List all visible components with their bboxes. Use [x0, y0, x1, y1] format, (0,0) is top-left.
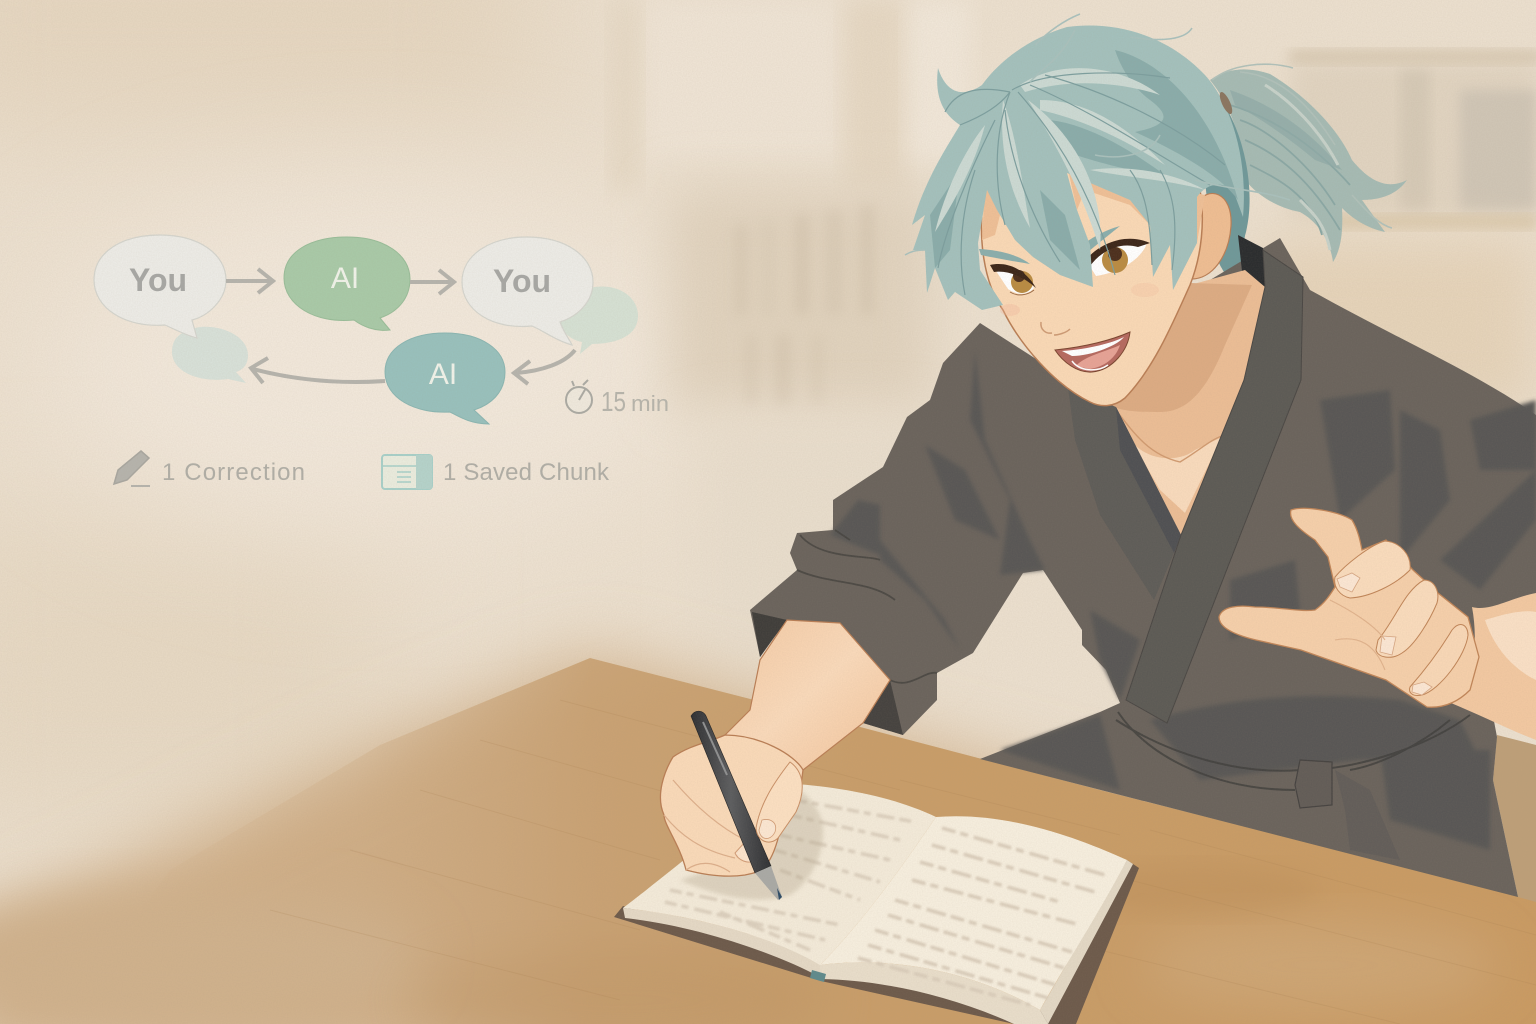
stopwatch and duration: 15 [601, 386, 626, 417]
curled finger 1 [1335, 541, 1410, 598]
writing arm [725, 620, 890, 770]
speech bubble: AI (second) [385, 333, 505, 424]
wooden chair behind person [1493, 735, 1536, 902]
speech bubble: You (first) [94, 235, 226, 338]
handwriting, right page [858, 828, 1105, 1005]
spine ribbon [810, 970, 826, 982]
correction label with pencil: 1 Correction [162, 459, 305, 486]
stopwatch and duration: min [631, 391, 669, 416]
speech bubble: You (second) [462, 237, 593, 345]
speech bubble: You (first): You [129, 262, 187, 298]
page block: left [623, 908, 822, 978]
flyaway wisps [905, 14, 1290, 255]
hand shadow on page [680, 790, 823, 900]
speech bubble: AI (second): AI [429, 358, 457, 391]
face [979, 154, 1205, 406]
wooden table [0, 658, 1536, 1024]
stopwatch and duration [566, 380, 669, 417]
robe collar bands [1068, 250, 1303, 723]
pale bubble: left [172, 327, 248, 383]
ear [1190, 193, 1231, 279]
front hair [905, 14, 1290, 310]
arrow: AI to You [410, 270, 454, 294]
left eye [990, 264, 1036, 295]
saved chunk label with document [382, 455, 610, 489]
hair tie [1217, 90, 1235, 116]
open mouth [1055, 332, 1130, 372]
fingernails [1337, 573, 1432, 695]
arrow: You to AI [226, 269, 273, 293]
right page [820, 816, 1127, 1010]
person writing in notebook [614, 14, 1536, 1024]
palm and thumb [1219, 508, 1479, 707]
forearm [1451, 593, 1536, 740]
left page [623, 783, 936, 965]
ponytail and back hair [1195, 64, 1407, 296]
eyebrows [979, 226, 1120, 264]
hair strands [938, 73, 1225, 295]
handwriting, left page [665, 800, 915, 950]
inner collar shadow [1238, 235, 1265, 298]
saved chunk label with document: 1 Saved Chunk [443, 459, 610, 486]
nose [1041, 322, 1070, 335]
arrow: You down to AI [514, 350, 575, 384]
collar: left [1068, 387, 1181, 600]
right eye [1084, 239, 1150, 276]
pale bubble: right [560, 287, 638, 354]
pen [691, 711, 782, 900]
darker hair masses [930, 50, 1238, 270]
writing hand [660, 735, 803, 876]
highlights [935, 68, 1205, 250]
curled finger 2 [1376, 580, 1438, 657]
speech bubble: AI (first): AI [331, 262, 359, 295]
notebook [614, 783, 1139, 1024]
speech bubble: AI (first) [284, 237, 410, 330]
notebook cover [614, 860, 1139, 1024]
curled finger 3 [1410, 625, 1468, 696]
neck and chest [1107, 270, 1265, 535]
gesturing arm and hand [1219, 508, 1536, 740]
forehead shadow under fringe [982, 165, 1205, 243]
collar: right [1126, 250, 1303, 723]
page block: right [820, 962, 1048, 1024]
conversation loop diagram [94, 235, 669, 489]
arrow: AI back to start [251, 358, 385, 383]
robe body and sleeve [750, 238, 1536, 897]
speech bubble: You (second): You [493, 263, 551, 299]
correction label with pencil [114, 451, 305, 486]
thumb over pen [756, 762, 802, 842]
page block: fore-edge [1040, 860, 1133, 1024]
